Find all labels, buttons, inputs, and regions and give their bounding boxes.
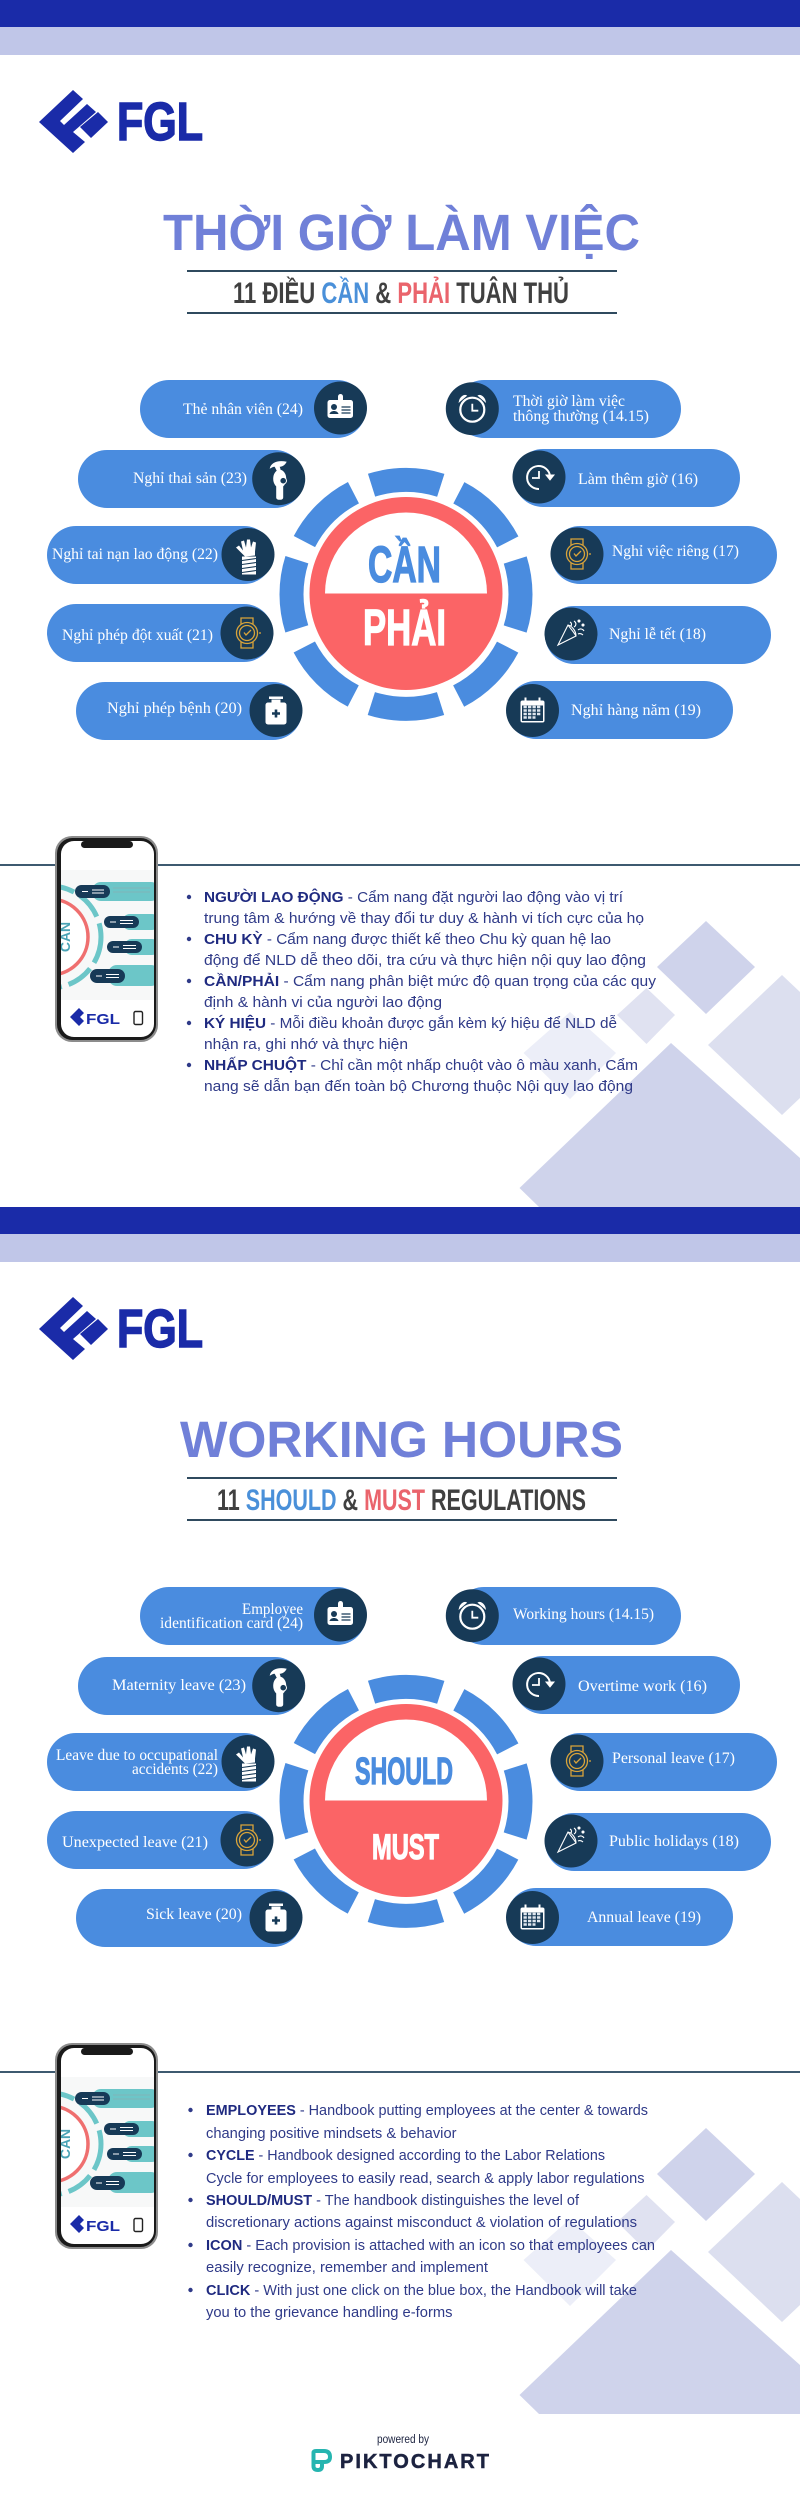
centre badge: SHOULD / MUST: MUST [372,1828,439,1867]
bullet list [188,2103,655,2321]
item: Employee identification card [140,1587,367,1645]
item: Annual leave [506,1888,733,1946]
item: Leave due to occupational accidents: accidents (22) [132,1761,218,1778]
item: Leave due to occupational accidents [47,1733,274,1791]
item: Nghỉ việc riêng [550,526,777,584]
item: Nghỉ hàng năm [506,681,733,739]
background diamonds [520,2128,800,2414]
top banner [0,0,800,55]
item: Thời giờ làm việc thông thường: Thời giờ làm việc [513,393,625,410]
item: Annual leave: Annual leave (19) [587,1909,701,1926]
item: Public holidays: Public holidays (18) [609,1833,739,1850]
bullet list: nhận ra, ghi nhớ và thực hiện [204,1037,408,1053]
FGL logo: FGL [117,92,203,152]
item: Nghỉ lễ tết [544,606,771,664]
footer: powered by Piktochart: powered by [377,2434,429,2446]
item: Leave due to occupational accidents: Leave due to occupational [56,1747,218,1764]
item: Nghỉ việc riêng: Nghỉ việc riêng (17) [612,543,739,560]
centre badge: SHOULD / MUST [292,1687,520,1916]
item: Nghỉ thai sản: Nghỉ thai sản (23) [133,470,247,487]
bullet list: CYCLE - Handbook designed according to the Labor Relations [206,2148,605,2164]
background diamonds [520,921,800,1207]
item: Overtime work [512,1656,740,1714]
top banner [0,1207,800,1262]
item: Thời giờ làm việc thông thường [446,380,681,438]
bullet list: động để NLD dễ theo dõi, tra cứu và thực hiện nội quy lao động [204,952,646,969]
item: Working hours [446,1587,681,1645]
item: Employee identification card: Employee [242,1601,303,1618]
bullet list: ICON - Each provision is attached with an icon so that employees can [206,2238,655,2254]
subtitle with rules: 11 ĐIỀU CẦN & PHẢI TUÂN THỦ [233,276,569,310]
title: WORKING HOURS [180,1411,623,1468]
item: Nghỉ phép bệnh [76,682,302,740]
item: Sick leave [76,1889,302,1947]
item: Nghỉ hàng năm: Nghỉ hàng năm (19) [571,702,701,719]
centre badge: CẦN / PHẢI [292,480,520,709]
item: Nghỉ thai sản [78,450,305,508]
FGL logo [39,90,203,153]
item: Thẻ nhân viên: Thẻ nhân viên (24) [183,401,303,418]
bullet list: trung tâm & hướng về thay đổi tư duy & hành vi tích cực của họ [204,911,644,927]
divider and phone mockup [0,2043,800,2249]
bullet list: KÝ HIỆU - Mỗi điều khoản được gắn kèm ký hiệu để NLD dễ [204,1014,617,1032]
item: Personal leave: Personal leave (17) [612,1750,735,1767]
footer: powered by Piktochart: PIKTOCHART [340,2451,489,2473]
item: Thời giờ làm việc thông thường: thông thường (14.15) [513,408,649,425]
bullet list: CẦN/PHẢI - Cẩm nang phân biệt mức độ quan trọng của các quy [204,973,657,990]
item: Nghỉ phép bệnh: Nghỉ phép bệnh (20) [107,700,242,717]
item: Public holidays [544,1813,771,1871]
item: Unexpected leave: Unexpected leave (21) [62,1834,208,1851]
bullet list [187,888,657,1095]
centre badge: CẦN / PHẢI: CẦN [368,535,441,593]
FGL logo [39,1297,203,1360]
bullet list: CHU KỲ - Cẩm nang được thiết kế theo Chu kỳ quan hệ lao [204,930,611,948]
bullet list: Cycle for employees to easily read, search & apply labor regulations [206,2171,644,2187]
bullet list: changing positive mindsets & behavior [206,2126,457,2142]
section: English [0,1207,800,2414]
bullet list: easily recognize, remember and implement [206,2260,488,2276]
bullet list: discretionary actions against misconduct & violation of regulations [206,2215,637,2231]
item: Nghỉ phép đột xuất: Nghỉ phép đột xuất (21) [62,627,213,644]
item: Nghỉ tai nạn lao động [47,526,274,584]
bullet list: CLICK - With just one click on the blue box, the Handbook will take [206,2283,637,2299]
bullet list: NHẤP CHUỘT - Chỉ cần một nhấp chuột vào ô màu xanh, Cẩm [204,1056,638,1074]
item: Unexpected leave [47,1811,274,1869]
item: Nghỉ lễ tết: Nghỉ lễ tết (18) [609,626,706,643]
item: Làm thêm giờ [512,449,740,507]
item: Maternity leave: Maternity leave (23) [112,1677,246,1694]
item: Làm thêm giờ: Làm thêm giờ (16) [578,471,698,488]
item: Employee identification card: identification card (24) [160,1615,303,1632]
FGL logo: FGL [117,1299,203,1359]
subtitle with rules: 11 SHOULD & MUST REGULATIONS [217,1484,586,1517]
item: Sick leave: Sick leave (20) [146,1906,242,1923]
bullet list: EMPLOYEES - Handbook putting employees at the center & towards [206,2103,648,2119]
bullet list: NGƯỜI LAO ĐỘNG - Cẩm nang đặt người lao động vào vị trí [204,888,623,906]
item: Personal leave [550,1733,777,1791]
item: Nghỉ tai nạn lao động: Nghỉ tai nạn lao động (22) [52,546,218,563]
section: Vietnamese [0,0,800,1207]
bullet list: nang sẽ dẫn bạn đến toàn bộ Chương thuộc Nội quy lao động [204,1078,633,1095]
footer: powered by Piktochart [314,2434,489,2473]
title: THỜI GIỜ LÀM VIỆC [163,203,640,261]
item: Thẻ nhân viên [140,380,367,438]
item: Working hours: Working hours (14.15) [513,1606,654,1623]
bullet list: you to the grievance handling e-forms [206,2305,452,2321]
centre badge: CẦN / PHẢI: PHẢI [363,598,446,656]
divider and phone mockup [0,836,800,1042]
bullet list: định & hành vi của người lao động [204,995,442,1011]
centre badge: SHOULD / MUST: SHOULD [355,1751,453,1793]
bullet list: SHOULD/MUST - The handbook distinguishes the level of [206,2193,580,2209]
item: Maternity leave [78,1657,305,1715]
item: Overtime work: Overtime work (16) [578,1678,707,1695]
item: Nghỉ phép đột xuất [47,604,274,662]
